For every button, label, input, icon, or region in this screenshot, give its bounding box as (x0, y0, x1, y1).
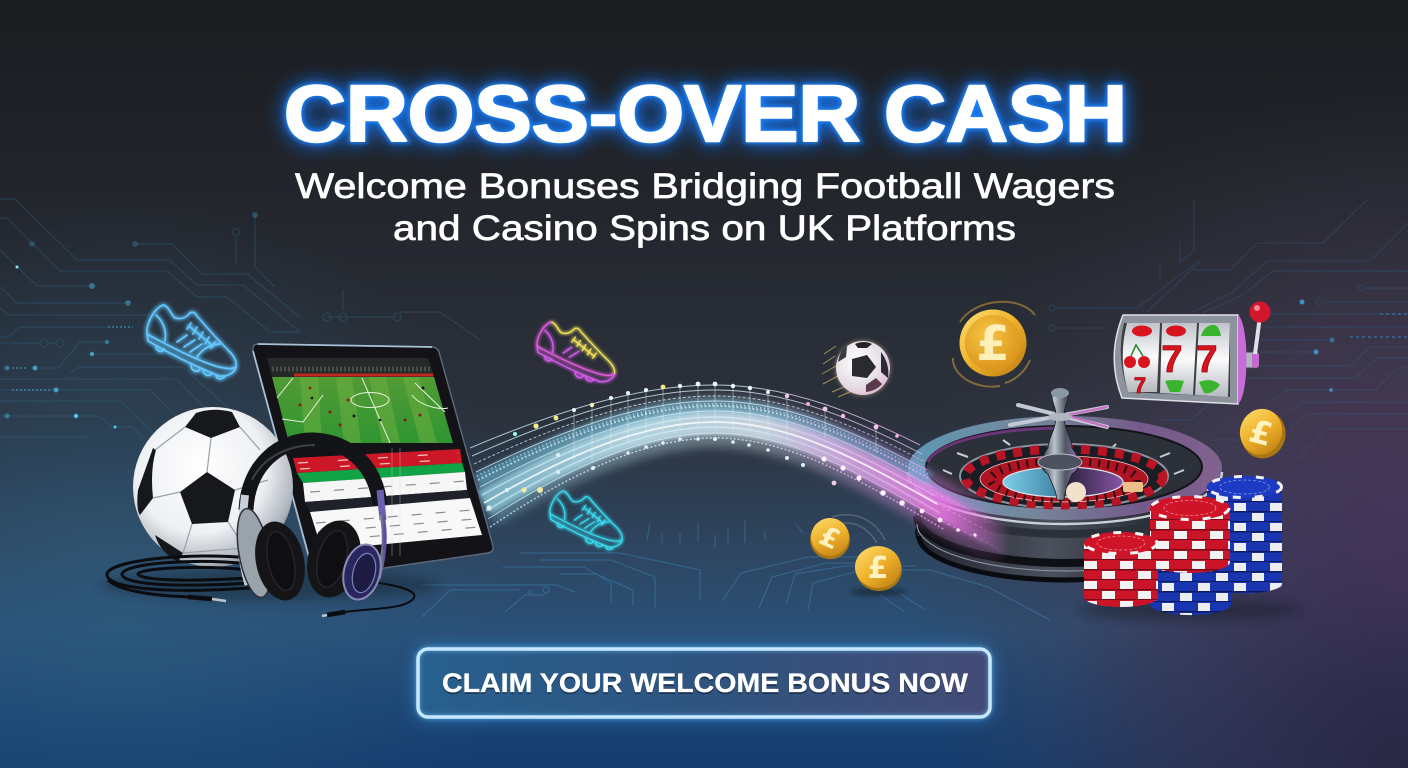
reel sevens: 7 (1161, 339, 1183, 381)
floor shadow under football kit (100, 569, 440, 601)
roulette inner cone (1003, 467, 1123, 497)
slot reels (1121, 323, 1230, 398)
poker chips (1080, 476, 1300, 620)
reel sevens: 7 (1134, 373, 1146, 398)
tablet crowd (267, 358, 434, 377)
ball sphere (133, 407, 293, 567)
coin: large pound with swirl: £ (976, 316, 1010, 372)
chip stack red on blue (1150, 496, 1231, 615)
coin: right small pound: £ (1245, 411, 1276, 454)
title: CROSS-OVER CASH (284, 69, 1127, 158)
slot machine (1114, 302, 1270, 404)
circuit lines: left (0, 199, 480, 438)
call to action button: CLAIM YOUR WELCOME BONUS NOW (442, 668, 969, 698)
ball seams (153, 427, 268, 553)
icon: neon boot yellow and magenta (537, 322, 615, 382)
wave bottom dots (486, 437, 836, 511)
roulette number ring (960, 444, 1168, 508)
coin: large pound with swirl (953, 302, 1035, 387)
circuit nodes: right (1300, 300, 1408, 392)
coin: floor small pound left: £ (814, 520, 844, 556)
football (133, 407, 293, 567)
call to action button (418, 649, 990, 717)
tablet odds table (293, 448, 482, 556)
reel sevens: 7 (1196, 339, 1218, 381)
left ear cup (231, 506, 312, 605)
chip stack blue tall (1206, 476, 1282, 593)
headphone cable coil (107, 556, 250, 601)
tablet (253, 344, 493, 577)
headphone cable right (322, 582, 414, 616)
call to action button: CLAIM YOUR WELCOME BONUS NOW (442, 670, 969, 700)
ball pentagons (137, 410, 240, 562)
roulette wheel (908, 388, 1222, 580)
subtitle (295, 166, 1115, 248)
roulette base (915, 485, 1215, 580)
coin: floor small pound right: £ (868, 551, 888, 586)
circuit lines: right (1049, 200, 1408, 460)
coin motion swirl (832, 515, 885, 543)
tablet pitch (272, 377, 453, 443)
subtitle: Welcome Bonuses Bridging Football Wagers (295, 166, 1115, 206)
roulette spindle (1010, 388, 1107, 500)
roulette ball (1066, 482, 1086, 502)
headphones (231, 440, 386, 605)
icon: neon boot cyan (550, 491, 622, 549)
right ear cup (299, 515, 386, 604)
reel leaves (1165, 325, 1221, 393)
coin: floor small pound left (803, 512, 857, 566)
circuit lines: floor (422, 520, 1050, 620)
reel sevens (1134, 339, 1218, 398)
subtitle: and Casino Spins on UK Platforms (393, 208, 1016, 248)
roulette outer rim (908, 416, 1222, 520)
wave strands (470, 385, 1005, 550)
headband (240, 440, 384, 585)
slot end cap (1238, 315, 1247, 404)
slot drum (1114, 315, 1238, 404)
small football with motion lines (822, 340, 891, 397)
wave vertical ticks (574, 384, 876, 462)
icon: neon boot blue (147, 305, 236, 379)
wave core glow (478, 406, 1010, 545)
reel cherries (1124, 326, 1186, 368)
wave pink dots (821, 456, 977, 537)
chip stack red short (1084, 532, 1158, 607)
coin: right small pound (1234, 404, 1291, 463)
title: CROSS-OVER CASH (284, 69, 1127, 158)
data wave (470, 382, 1010, 550)
wave top dots (513, 382, 899, 438)
slot lever (1238, 302, 1270, 368)
title: CROSS-OVER CASH (284, 69, 1127, 158)
roulette inner track (926, 426, 1202, 508)
coin: floor small pound right (850, 546, 906, 596)
tablet body (253, 344, 493, 577)
circuit nodes: left (4, 212, 258, 428)
